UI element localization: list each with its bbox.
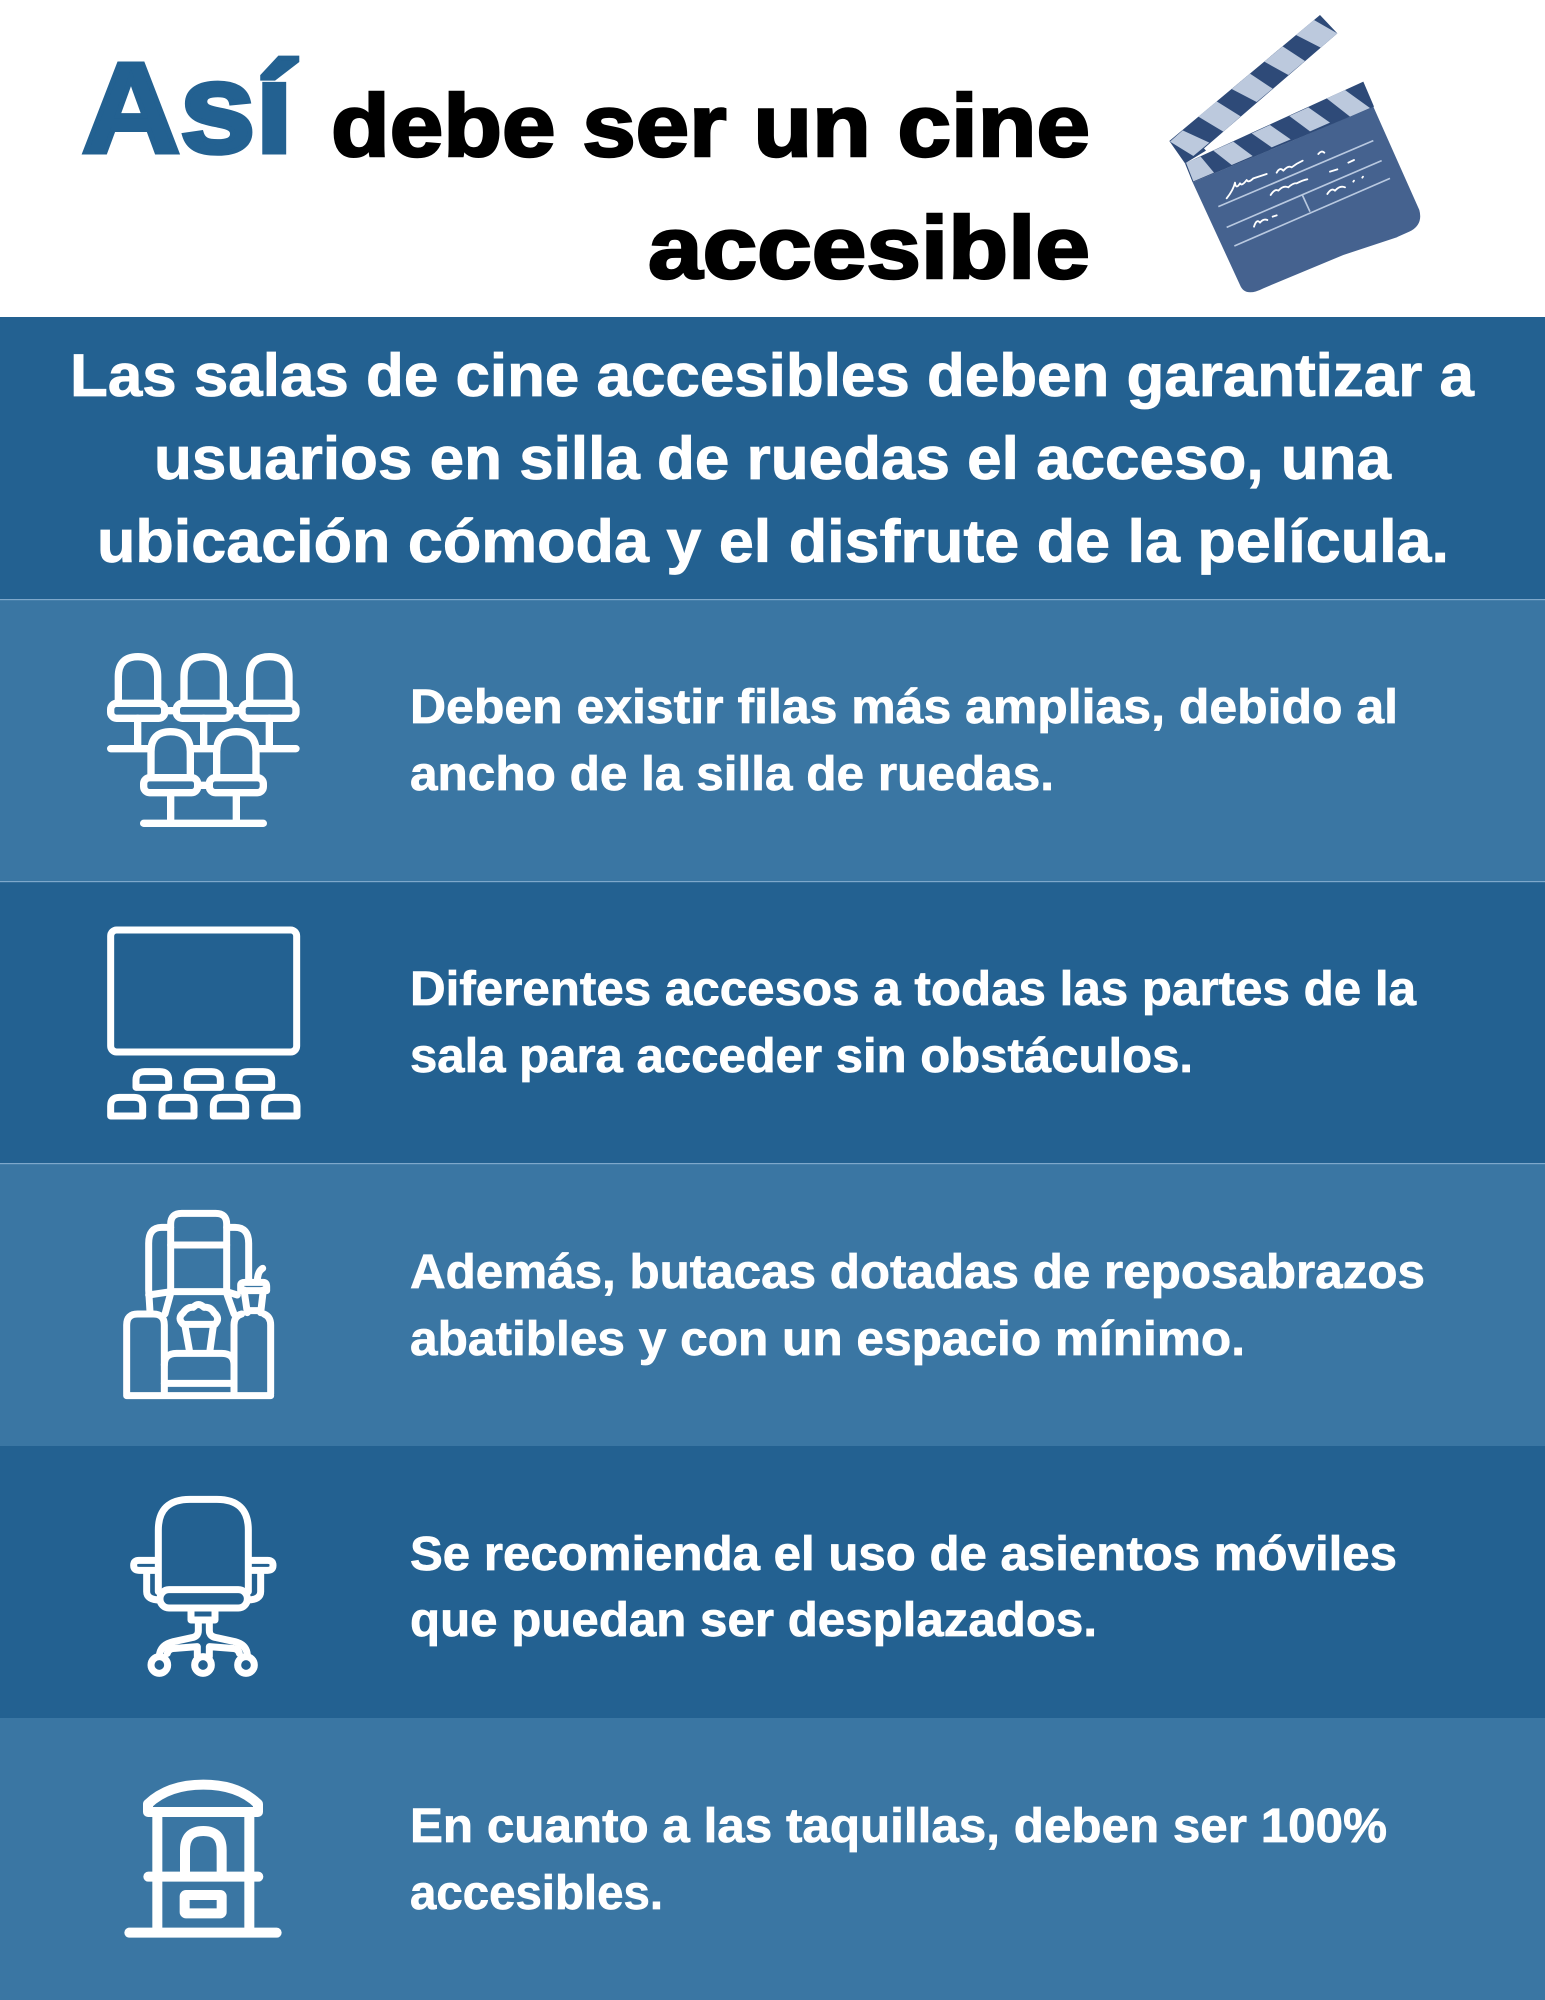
text: wider rows: Deben existir filas más amplias, debido al <box>410 681 1398 734</box>
text: wider rows: ancho de la silla de ruedas. <box>410 748 1054 801</box>
intro text: usuarios en silla de ruedas el acceso, una <box>154 425 1392 492</box>
panel: ticket offices <box>0 1718 1545 2000</box>
title: accesible <box>648 198 1090 297</box>
icon: screen and seats <box>111 930 297 1116</box>
text: multiple accesses: Diferentes accesos a todas las partes de la <box>410 963 1416 1016</box>
text: armchairs <box>410 1246 1425 1366</box>
text: multiple accesses <box>410 963 1416 1083</box>
text: multiple accesses: sala para acceder sin obstáculos. <box>410 1030 1193 1083</box>
panel: introduction <box>0 317 1545 600</box>
text: movable seats <box>410 1528 1397 1647</box>
text: ticket offices: En cuanto a las taquillas, deben ser 100% <box>410 1800 1387 1853</box>
text: movable seats: Se recomienda el uso de asientos móviles <box>410 1528 1397 1581</box>
text: ticket offices: accesibles. <box>410 1867 663 1920</box>
panel: armchairs <box>0 1164 1545 1446</box>
intro text <box>70 342 1475 575</box>
intro text: ubicación cómoda y el disfrute de la película. <box>97 508 1449 575</box>
text: movable seats: que puedan ser desplazados. <box>410 1594 1097 1647</box>
icon: office chair on wheels <box>134 1499 273 1673</box>
icon: rows of seats <box>111 657 296 823</box>
icon: armchair with popcorn and drink <box>127 1213 271 1396</box>
icon: film clapperboard <box>1169 15 1420 292</box>
title: debe ser un cine <box>331 76 1090 175</box>
text: wider rows <box>410 681 1398 801</box>
title <box>82 37 1090 297</box>
text: armchairs: Además, butacas dotadas de reposabrazos <box>410 1246 1425 1299</box>
text: ticket offices <box>410 1800 1387 1920</box>
panel: movable seats <box>0 1446 1545 1718</box>
title: Así <box>82 37 297 180</box>
panel: multiple accesses <box>0 882 1545 1164</box>
intro text: Las salas de cine accesibles deben garantizar a <box>70 342 1475 409</box>
panel: wider rows <box>0 600 1545 882</box>
text: armchairs: abatibles y con un espacio mínimo. <box>410 1313 1245 1366</box>
icon: ticket booth <box>129 1785 277 1933</box>
